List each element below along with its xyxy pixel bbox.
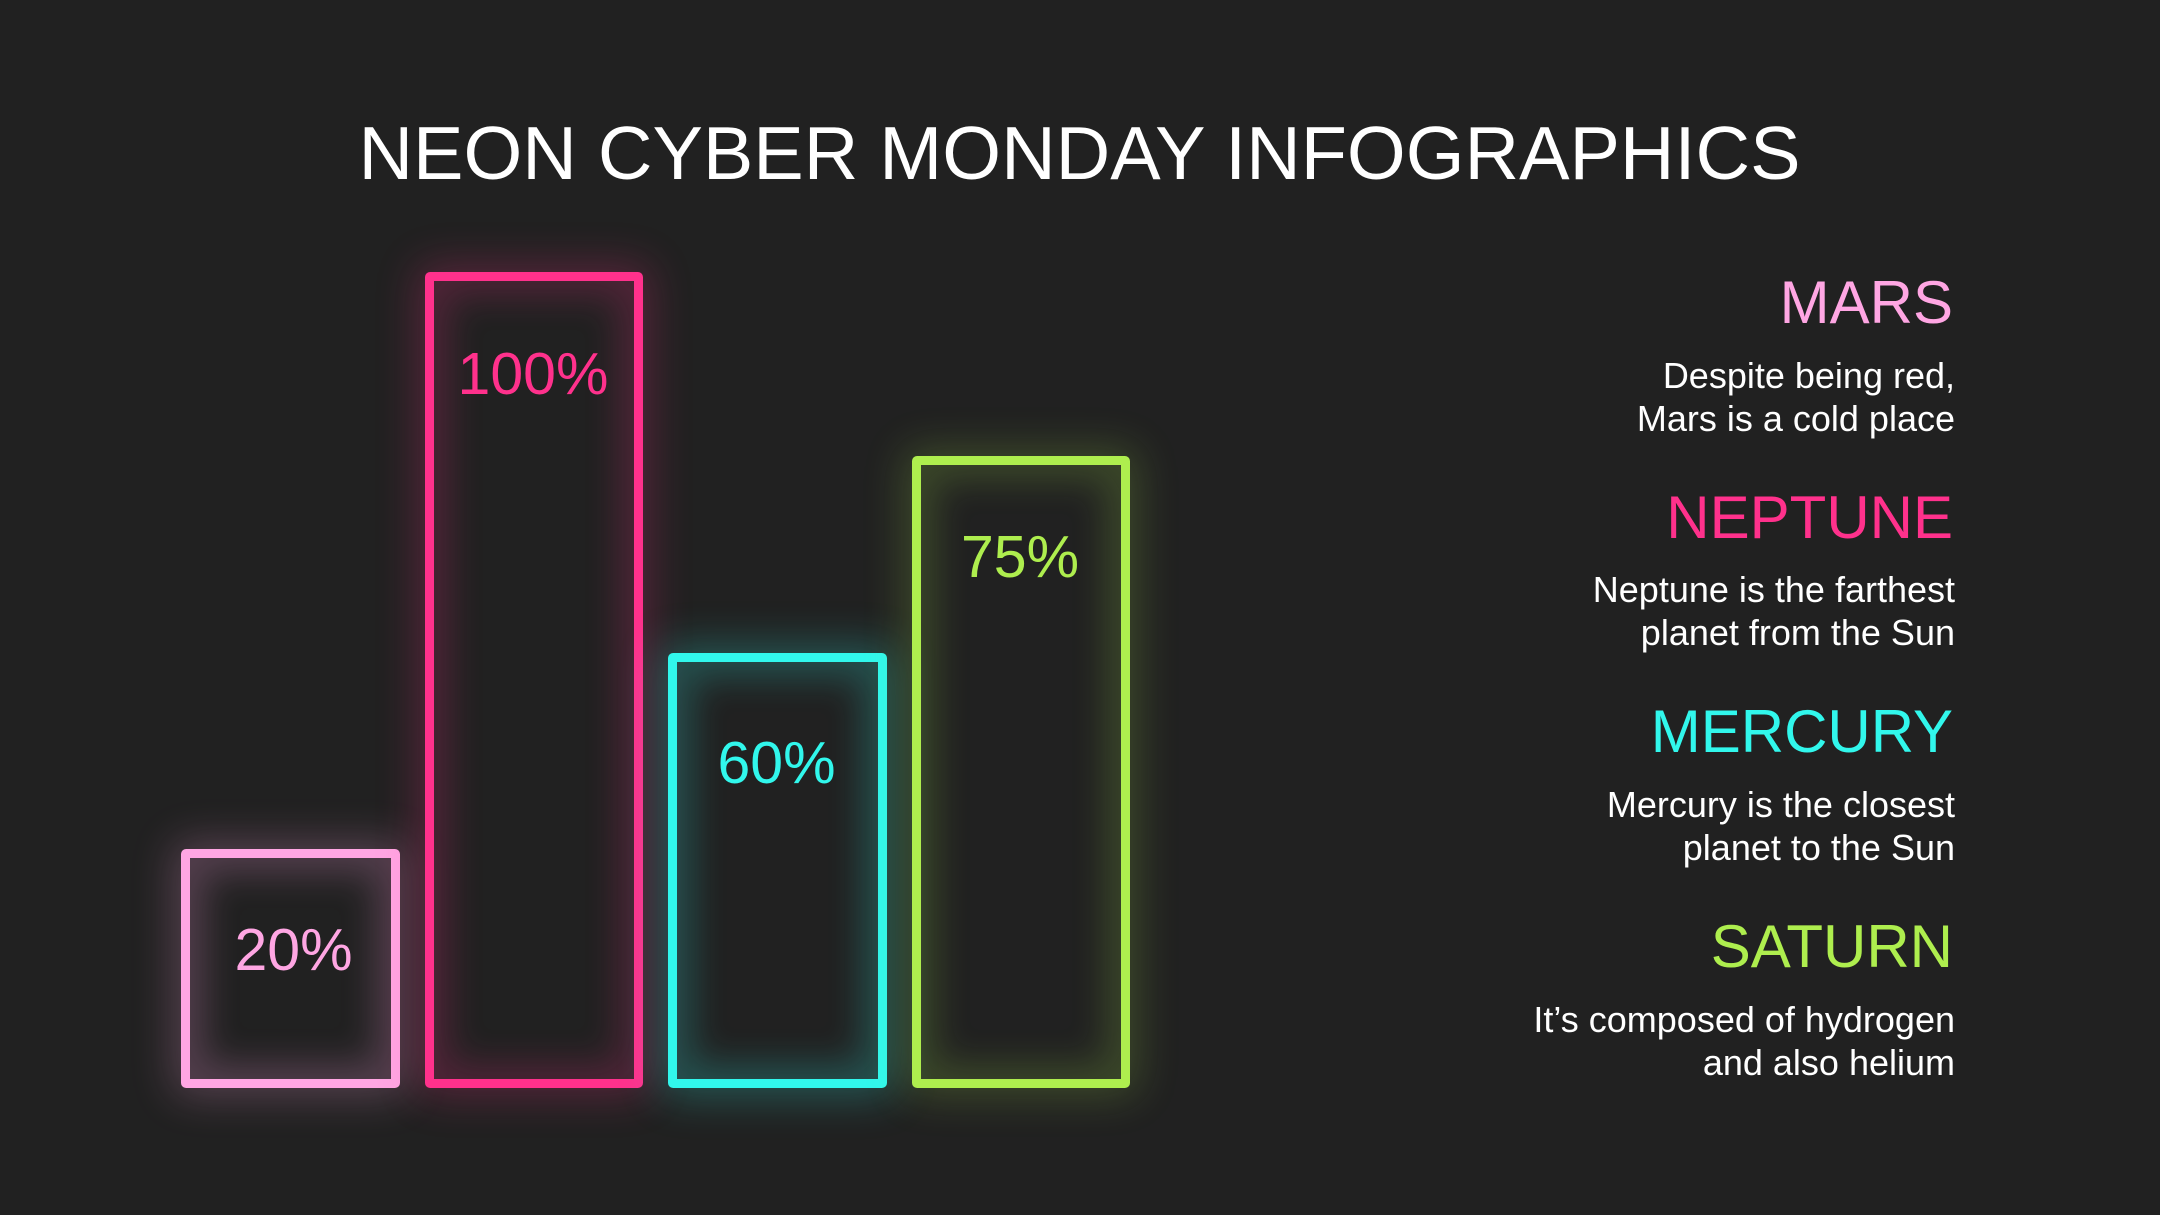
heading: Mars: MARS	[1780, 269, 1953, 336]
bar chart	[154, 245, 1154, 1116]
label: 60%: 60%	[717, 730, 836, 796]
label: 100%: 100%	[458, 341, 608, 407]
text: Mars: Despite being red,	[1663, 355, 1955, 396]
label: 20%: 20%	[234, 917, 353, 983]
text: Mercury: Mercury is the closest	[1607, 784, 1955, 825]
text: Mars	[1637, 355, 1955, 439]
bar: 60%	[668, 653, 887, 1088]
text: Mercury	[1607, 784, 1955, 868]
text: Mars: Mars is a cold place	[1637, 398, 1955, 439]
legend	[1533, 269, 1955, 1083]
heading: Mercury: MERCURY	[1651, 698, 1953, 765]
heading: Saturn: SATURN	[1711, 913, 1953, 980]
label: 75%: 75%	[961, 524, 1079, 590]
text: Saturn	[1533, 999, 1955, 1083]
text: Neptune: planet from the Sun	[1641, 612, 1955, 653]
title: NEON CYBER MONDAY INFOGRAPHICS	[358, 112, 1801, 196]
bar: 75%	[912, 456, 1130, 1088]
text: Neptune	[1593, 569, 1955, 653]
text: Mercury: planet to the Sun	[1683, 827, 1955, 868]
heading: Neptune: NEPTUNE	[1666, 484, 1953, 551]
text: Neptune: Neptune is the farthest	[1593, 569, 1955, 610]
text: Saturn: and also helium	[1703, 1042, 1955, 1083]
text: Saturn: It’s composed of hydrogen	[1533, 999, 1955, 1040]
bar: 100%	[425, 272, 643, 1088]
bar: 20%	[181, 849, 400, 1088]
